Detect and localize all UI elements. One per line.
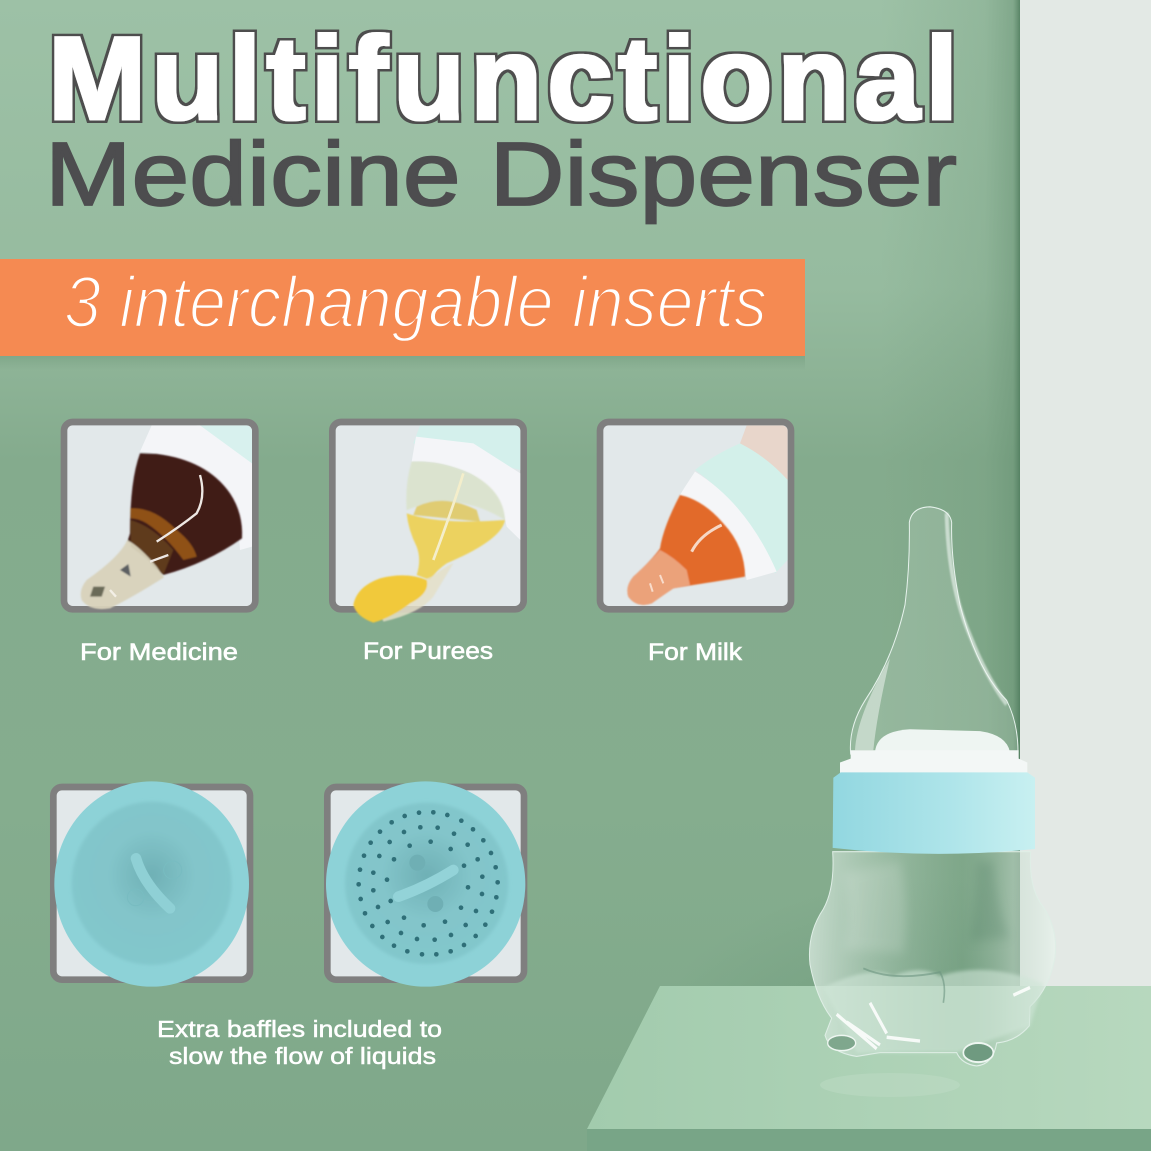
icon: perforated baffle disc	[326, 781, 525, 987]
icon: bottle nipple	[850, 507, 1018, 754]
title line 2: Medicine Dispenser	[45, 125, 957, 225]
label: for milk: For Milk	[648, 639, 743, 666]
label: for medicine: For Medicine	[80, 639, 238, 666]
panel: for medicine	[64, 422, 255, 609]
orange banner	[0, 259, 805, 356]
caption: baffles: slow the flow of liquids	[169, 1043, 436, 1069]
icon: bottle body	[809, 852, 1056, 1066]
panel: plain baffle	[53, 781, 250, 987]
panel: perforated baffle	[326, 781, 525, 987]
title	[45, 13, 958, 225]
label: for purees: For Purees	[363, 638, 493, 665]
icon: medicine liquid	[81, 453, 242, 609]
panel: for milk	[600, 422, 791, 609]
icon: bottle white collar	[840, 750, 1027, 775]
icon: milk teat	[627, 495, 745, 605]
title line 1: Multifunctional	[48, 13, 958, 145]
icon: puree liquid	[353, 461, 505, 623]
panel: for purees	[332, 422, 524, 623]
bottle	[809, 507, 1056, 1066]
banner text: 3 interchangable inserts	[64, 263, 767, 343]
shelf reflection	[820, 1073, 960, 1097]
caption: baffles	[157, 1016, 442, 1069]
icon: bottle blue band	[833, 772, 1035, 854]
shelf	[587, 986, 1151, 1151]
caption: baffles: Extra baffles included to	[157, 1016, 442, 1042]
icon: plain baffle disc	[54, 781, 249, 987]
